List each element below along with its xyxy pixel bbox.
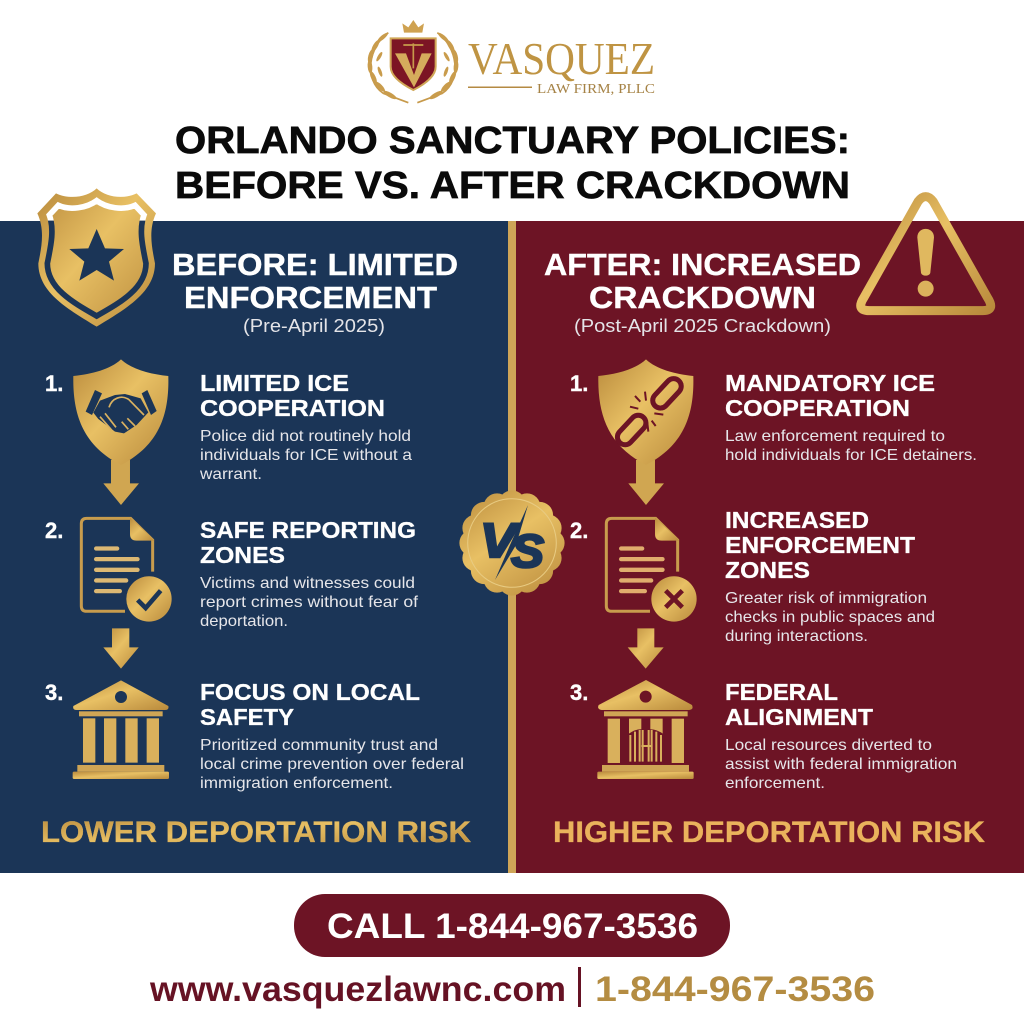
- after item 3: federal alignment: [570, 628, 957, 792]
- before item 3: focus on local safety: SAFETY: [200, 704, 294, 730]
- number 3: 3.: [45, 680, 63, 705]
- number 2: 2.: [45, 518, 63, 543]
- before item 3: focus on local safety: immigration enforcement.: [200, 775, 393, 792]
- footer contact line: [149, 967, 875, 1009]
- after item 3: federal alignment: ALIGNMENT: [725, 704, 873, 730]
- logo subtitle: LAW FIRM, PLLC: [537, 82, 655, 97]
- after item 2: increased enforcement zones: ENFORCEMENT: [725, 532, 915, 558]
- after item 3: federal alignment: assist with federal immigration: [725, 756, 957, 773]
- before heading: (Pre-April 2025): [243, 316, 385, 336]
- after item 2: increased enforcement zones: checks in public spaces and: [725, 609, 935, 626]
- item heading: SAFE REPORTING: [200, 517, 416, 543]
- item heading: FEDERAL: [725, 679, 838, 705]
- icon: document with check: [81, 518, 172, 622]
- number 3: 3.: [570, 680, 588, 705]
- number 1: 1.: [570, 371, 588, 396]
- after item 1: mandatory ICE cooperation: COOPERATION: [725, 395, 910, 421]
- after item 1: mandatory ICE cooperation: hold individuals for ICE detainers.: [725, 447, 977, 464]
- number 2: 2.: [570, 518, 588, 543]
- item description: Prioritized community trust and: [200, 737, 438, 754]
- item heading: INCREASED: [725, 507, 869, 533]
- icon: VS badge: [451, 482, 573, 604]
- icon: shield with handshake and arrow: [73, 359, 168, 505]
- before item 2: safe reporting zones: report crimes without fear of: [200, 594, 419, 611]
- before item 2: safe reporting zones: [45, 517, 419, 630]
- call button: [294, 894, 730, 957]
- before heading: ENFORCEMENT: [184, 280, 437, 315]
- item description: Local resources diverted to: [725, 737, 932, 754]
- before heading: [172, 247, 458, 336]
- before heading: BEFORE: LIMITED: [172, 247, 458, 282]
- item description: Police did not routinely hold: [200, 428, 411, 445]
- footer contact line: www.vasquezlawnc.com: [149, 970, 566, 1009]
- center divider: [508, 221, 516, 873]
- after item 1: mandatory ICE cooperation: [570, 359, 977, 505]
- before item 3: focus on local safety: local crime prevention over federal: [200, 756, 464, 773]
- before item 1: limited ICE cooperation: [45, 359, 412, 505]
- before item 1: limited ICE cooperation: individuals for ICE without a: [200, 447, 412, 464]
- icon: laurel crest: [367, 20, 459, 103]
- icon: VS badge: S: [511, 525, 544, 577]
- title: [175, 120, 850, 207]
- icon: arrow and courthouse: [73, 628, 169, 779]
- after item 2: increased enforcement zones: during interactions.: [725, 628, 868, 645]
- footer contact line: 1-844-967-3536: [595, 970, 875, 1009]
- before item 2: safe reporting zones: deportation.: [200, 613, 288, 630]
- title: ORLANDO SANCTUARY POLICIES:: [175, 120, 850, 162]
- after item 2: increased enforcement zones: [570, 507, 935, 645]
- after heading: [544, 247, 861, 336]
- item heading: FOCUS ON LOCAL: [200, 679, 420, 705]
- icon: warning triangle: [861, 197, 991, 311]
- before item 3: focus on local safety: [45, 628, 464, 792]
- item description: Victims and witnesses could: [200, 575, 415, 592]
- number 1: 1.: [45, 371, 63, 396]
- before item 1: limited ICE cooperation: warrant.: [199, 466, 262, 483]
- after heading: AFTER: INCREASED: [544, 247, 861, 282]
- logo: Vasquez Law Firm: [367, 20, 655, 103]
- after item 2: increased enforcement zones: ZONES: [725, 557, 810, 583]
- logo rule: [468, 86, 532, 88]
- after heading: CRACKDOWN: [589, 280, 816, 315]
- call button: CALL 1-844-967-3536: [327, 907, 698, 946]
- logo wordmark: VASQUEZ: [468, 33, 655, 84]
- icon: arrow and courthouse with gate: [597, 628, 694, 779]
- VS slash: [495, 505, 528, 580]
- icon: police badge: [37, 188, 156, 327]
- before item 1: limited ICE cooperation: COOPERATION: [200, 395, 385, 421]
- before risk label: LOWER DEPORTATION RISK: [41, 816, 471, 849]
- icon: shield with broken chain and arrow: [598, 359, 693, 505]
- before item 2: safe reporting zones: ZONES: [200, 542, 285, 568]
- after item 3: federal alignment: enforcement.: [725, 775, 825, 792]
- after heading: (Post-April 2025 Crackdown): [574, 316, 831, 336]
- after risk label: HIGHER DEPORTATION RISK: [553, 816, 985, 849]
- item description: Law enforcement required to: [725, 428, 945, 445]
- item heading: MANDATORY ICE: [725, 370, 935, 396]
- title: BEFORE VS. AFTER CRACKDOWN: [175, 165, 850, 207]
- panel: after: [510, 221, 1024, 873]
- icon: document with x: [606, 518, 697, 622]
- item description: Greater risk of immigration: [725, 590, 927, 607]
- VS letters: V: [480, 515, 520, 568]
- item heading: LIMITED ICE: [200, 370, 349, 396]
- panel: before: [0, 221, 510, 873]
